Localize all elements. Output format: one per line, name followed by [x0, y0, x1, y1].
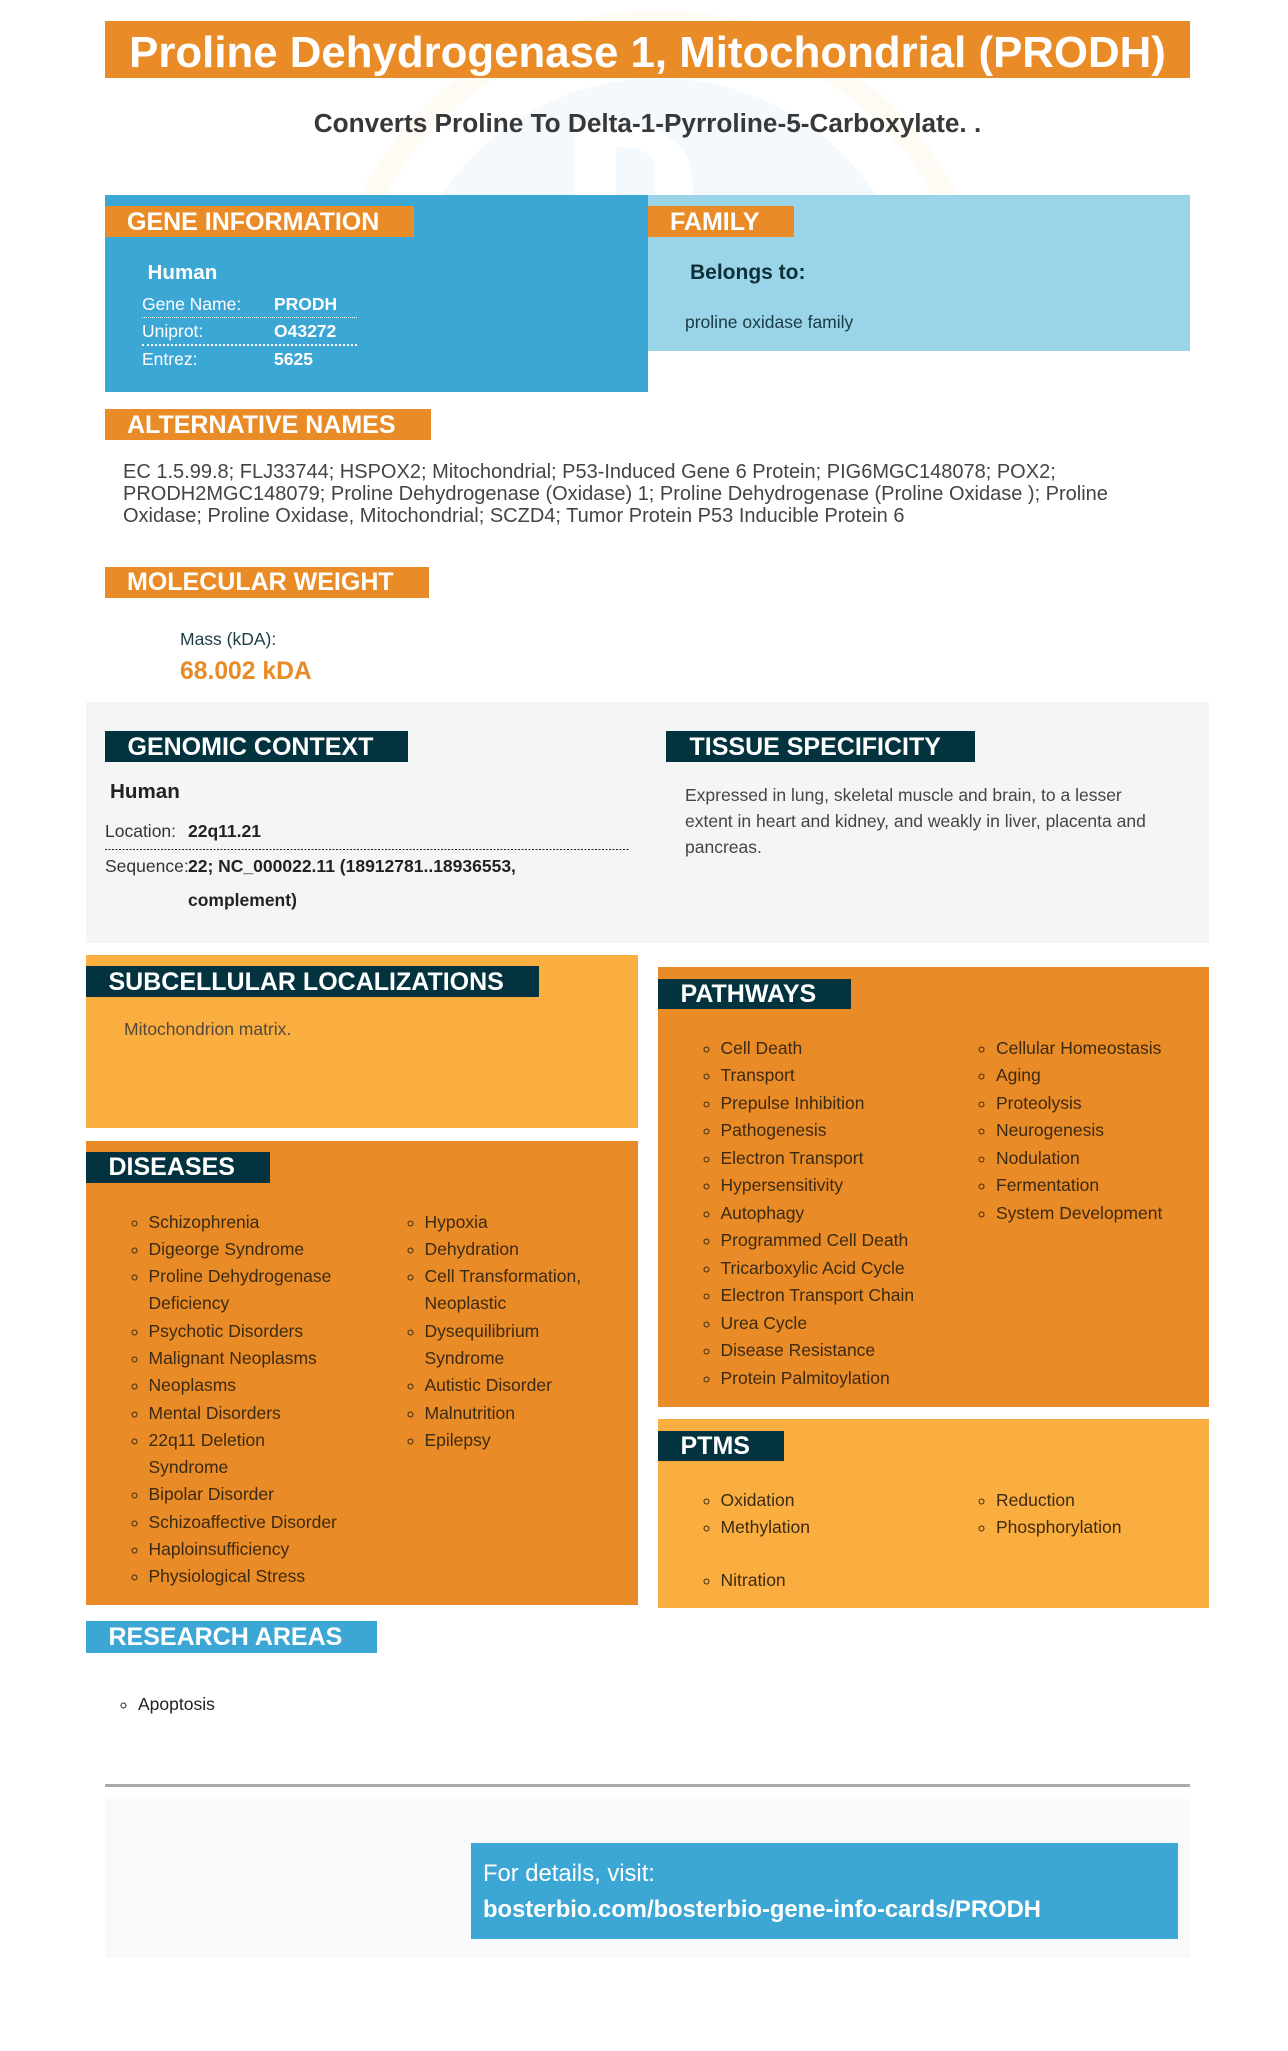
heading: pathways: PATHWAYS: [680, 980, 816, 1008]
gene name row: PRODH: [274, 294, 337, 314]
heading: diseases: [86, 1152, 270, 1183]
disease list column 1: 22q11 Deletion: [148, 1430, 265, 1450]
heading: ptms: [658, 1431, 784, 1461]
pathway list column 1: Electron Transport Chain: [720, 1285, 914, 1305]
disease list column 1: Proline Dehydrogenase: [148, 1266, 331, 1286]
sequence row: complement): [188, 890, 297, 910]
pathway list column 1: Prepulse Inhibition: [720, 1092, 864, 1112]
heading: family: [648, 206, 794, 237]
entrez row: [142, 349, 313, 369]
disease list column 1: Digeorge Syndrome: [148, 1239, 304, 1259]
disease list column 1: Deficiency: [148, 1293, 229, 1313]
alternative names text: EC 1.5.99.8; FLJ33744; HSPOX2; Mitochondrial; P53-Induced Gene 6 Protein; PIG6MGC148078; POX2;: [123, 461, 1056, 483]
disease list column 1: Syndrome: [148, 1457, 228, 1477]
callout label: For details, visit:: [483, 1860, 655, 1887]
pathway list column 1: Disease Resistance: [720, 1340, 875, 1360]
panel: diseases: [86, 1141, 638, 1605]
uniprot row: [142, 321, 336, 341]
molecular weight value: Mass (kDA):: [180, 629, 276, 649]
pathway list column 1: Transport: [720, 1065, 795, 1085]
disease list column 2: [408, 1212, 581, 1450]
disease list column 2: Epilepsy: [424, 1430, 491, 1450]
heading: gene information: GENE INFORMATION: [127, 208, 379, 236]
entrez row: 5625: [274, 349, 313, 369]
ptm list column 1: Oxidation: [720, 1490, 794, 1510]
disease list column 2: Dehydration: [424, 1239, 519, 1259]
pathway list column 1: Pathogenesis: [720, 1120, 827, 1140]
tissue specificity text: pancreas.: [685, 837, 762, 857]
pathway list column 1: Protein Palmitoylation: [720, 1368, 890, 1388]
family name: proline oxidase family: [685, 312, 853, 332]
entrez row: Entrez:: [142, 349, 197, 369]
disease list column 1: Mental Disorders: [148, 1403, 281, 1423]
species label: Human: [110, 780, 180, 803]
pathway list column 2: Proteolysis: [996, 1092, 1082, 1112]
panel: genomic context and tissue specificity: [86, 702, 1209, 943]
sequence row: [105, 856, 516, 910]
alternative names text: Oxidase; Proline Oxidase, Mitochondrial; SCZD4; Tumor Protein P53 Inducible Protein 6: [123, 505, 904, 527]
ptm list column 2: [978, 1490, 1122, 1537]
heading: diseases: DISEASES: [108, 1153, 235, 1181]
disease list column 1: Malignant Neoplasms: [148, 1348, 317, 1368]
ptm list column 1: Nitration: [720, 1570, 786, 1590]
pathway list column 1: Autophagy: [720, 1202, 804, 1222]
subtitle: Converts Proline To Delta-1-Pyrroline-5-Carboxylate. .: [314, 108, 981, 138]
uniprot row: Uniprot:: [142, 321, 203, 341]
disease list column 1: Haploinsufficiency: [148, 1539, 289, 1559]
disease list column 2: Dysequilibrium: [424, 1321, 539, 1341]
heading: family: FAMILY: [670, 208, 759, 236]
ptm list column 2: Phosphorylation: [996, 1517, 1122, 1537]
uniprot row: O43272: [274, 321, 336, 341]
heading: research areas: RESEARCH AREAS: [108, 1623, 342, 1651]
molecular weight value: [180, 629, 312, 685]
tissue specificity text: [685, 785, 1146, 857]
ptm list column 2: Reduction: [996, 1490, 1075, 1510]
disease list column 2: Malnutrition: [424, 1403, 515, 1423]
panel: gene information: [105, 195, 648, 392]
callout url: bosterbio.com/bosterbio-gene-info-cards/PRODH: [483, 1896, 1041, 1923]
research areas list: Apoptosis: [138, 1694, 215, 1714]
heading: molecular weight: MOLECULAR WEIGHT: [127, 568, 394, 596]
sequence row: Sequence:: [105, 856, 189, 876]
disease list column 1: Neoplasms: [148, 1375, 236, 1395]
heading: ptms: PTMS: [680, 1432, 750, 1460]
pathway list column 1: Cell Death: [720, 1038, 802, 1058]
ptm list column 1: Methylation: [720, 1517, 810, 1537]
alternative names text: [123, 461, 1108, 527]
pathway list column 2: Aging: [996, 1065, 1041, 1085]
sequence row: 22; NC_000022.11 (18912781..18936553,: [188, 856, 516, 876]
heading: alternative names: ALTERNATIVE NAMES: [127, 411, 396, 439]
pathway list column 1: Electron Transport: [720, 1148, 863, 1168]
disease list column 1: Bipolar Disorder: [148, 1484, 274, 1504]
belongs to label: Belongs to:: [690, 261, 806, 284]
tissue specificity text: Expressed in lung, skeletal muscle and brain, to a lesser: [685, 785, 1122, 805]
tissue specificity text: extent in heart and kidney, and weakly in liver, placenta and: [685, 811, 1146, 831]
pathway list column 2: Neurogenesis: [996, 1120, 1104, 1140]
disease list column 1: Physiological Stress: [148, 1566, 305, 1586]
gene name row: Gene Name:: [142, 294, 241, 314]
location row: 22q11.21: [188, 821, 261, 841]
panel: subcellular localizations: [86, 955, 638, 1128]
location row: [105, 821, 261, 841]
gene name row: [142, 294, 337, 314]
panel: footer: [105, 1799, 1190, 1958]
ptm list column 1: [704, 1490, 810, 1590]
pathway list column 2: Nodulation: [996, 1148, 1080, 1168]
disease list column 1: Schizoaffective Disorder: [148, 1512, 337, 1532]
callout: details link: [471, 1843, 1178, 1939]
heading: pathways: [658, 979, 851, 1009]
pathway list column 2: System Development: [996, 1202, 1162, 1222]
alternative names text: PRODH2MGC148079; Proline Dehydrogenase (Oxidase) 1; Proline Dehydrogenase (Proline Oxidase ); Proline: [123, 483, 1108, 505]
location row: Location:: [105, 821, 176, 841]
heading: tissue specificity: TISSUE SPECIFICITY: [690, 733, 941, 761]
molecular weight value: 68.002 kDA: [180, 658, 312, 685]
disease list column 2: Neoplastic: [424, 1293, 506, 1313]
panel: ptms: [658, 1419, 1209, 1608]
disease list column 2: Cell Transformation,: [424, 1266, 581, 1286]
pathway list column 1: Hypersensitivity: [720, 1175, 843, 1195]
panel: pathways: [658, 967, 1209, 1407]
heading: genomic context: GENOMIC CONTEXT: [128, 733, 373, 761]
background watermark logo: [361, 10, 957, 195]
disease list column 1: Schizophrenia: [148, 1212, 259, 1232]
pathway list column 1: Tricarboxylic Acid Cycle: [720, 1258, 905, 1278]
title: Proline Dehydrogenase 1, Mitochondrial (PRODH): [129, 28, 1166, 77]
disease list column 2: Syndrome: [424, 1348, 504, 1368]
disease list column 2: Autistic Disorder: [424, 1375, 552, 1395]
disease list column 1: [132, 1212, 337, 1586]
pathway list column 1: [704, 1038, 914, 1388]
localization text: Mitochondrion matrix.: [124, 1019, 291, 1039]
heading: subcellular localizations: SUBCELLULAR LOCALIZATIONS: [108, 968, 504, 996]
pathway list column 2: [978, 1038, 1162, 1222]
disease list column 2: Hypoxia: [424, 1212, 488, 1232]
pathway list column 1: Programmed Cell Death: [720, 1230, 908, 1250]
panel: family: [648, 195, 1190, 351]
species label: Human: [148, 261, 217, 284]
pathway list column 2: Fermentation: [996, 1175, 1099, 1195]
pathway list column 2: Cellular Homeostasis: [996, 1038, 1161, 1058]
pathway list column 1: Urea Cycle: [720, 1312, 807, 1332]
disease list column 1: Psychotic Disorders: [148, 1321, 303, 1341]
